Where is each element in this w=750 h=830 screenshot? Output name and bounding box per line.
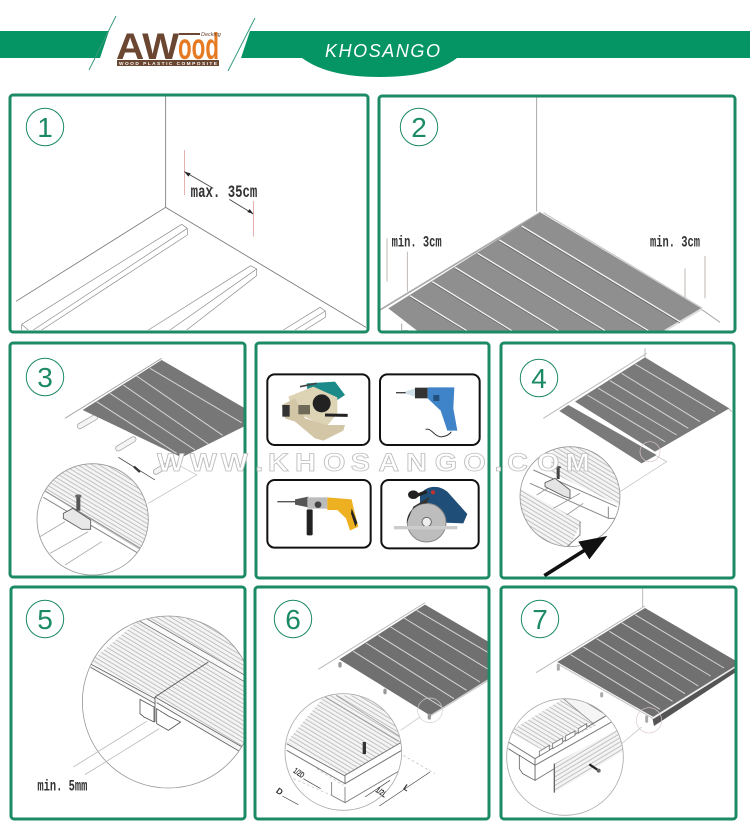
step number 6: 6 bbox=[285, 604, 301, 635]
logo: AW bbox=[116, 26, 179, 67]
drawing: deck against wall: min. 3cm bbox=[650, 233, 700, 251]
tool: miter saw bbox=[267, 374, 369, 445]
step number 5 bbox=[26, 600, 64, 638]
arrow: insert next board bbox=[544, 536, 607, 576]
panel: step 6 end fixing bbox=[255, 587, 490, 819]
step number 1: 1 bbox=[37, 112, 53, 143]
tool: yellow drill bbox=[267, 480, 371, 548]
tool: blue drill bbox=[380, 374, 480, 445]
dimension labels: 1/2D bbox=[292, 765, 307, 780]
drawing: room corner and joists bbox=[16, 95, 366, 330]
drawing: board seam detail: min. 5mm bbox=[37, 777, 87, 795]
step number 1 bbox=[26, 108, 64, 146]
drawing: deck with gap and detail bbox=[517, 348, 732, 553]
step number 5: 5 bbox=[37, 604, 53, 635]
dimension labels: 1/2L bbox=[374, 785, 389, 800]
logo divider left bbox=[89, 16, 116, 70]
step number 2 bbox=[400, 108, 438, 146]
brand title: KHOSANGO bbox=[325, 41, 440, 61]
step number 7 bbox=[521, 600, 559, 638]
panel: step 7 fascia bbox=[501, 587, 736, 819]
panel: step 1 joist spacing bbox=[10, 95, 368, 332]
tool: circular saw bbox=[381, 480, 479, 548]
step number 6 bbox=[274, 600, 312, 638]
drawing: deck with fascia board detail bbox=[507, 589, 735, 815]
watermark: WWW.KHOSANGO.COM bbox=[157, 449, 590, 477]
panel: step 5 expansion gap bbox=[11, 587, 254, 819]
drawing: deck against wall bbox=[380, 97, 720, 332]
dimension labels bbox=[276, 768, 408, 798]
step number 2: 2 bbox=[411, 112, 427, 143]
panel: step 2 perimeter gap bbox=[379, 96, 735, 332]
logo bbox=[116, 26, 222, 67]
green band right with title tab bbox=[241, 31, 750, 77]
step number 4: 4 bbox=[531, 363, 547, 394]
logo: ood bbox=[178, 26, 219, 67]
drawing: complete deck with dimension detail bbox=[274, 603, 490, 810]
logo divider right bbox=[228, 18, 255, 71]
header banner bbox=[0, 16, 750, 77]
green band left bbox=[0, 31, 109, 58]
logo: WOOD PLASTIC COMPOSITE bbox=[119, 61, 218, 67]
panel: step 4 next boards bbox=[501, 343, 734, 578]
panel: tools bbox=[256, 343, 489, 578]
step number 4 bbox=[520, 359, 558, 397]
step number 7: 7 bbox=[532, 604, 548, 635]
logo: Decking bbox=[201, 32, 222, 38]
panel: step 3 first board fixing bbox=[10, 343, 245, 577]
dimension labels: D bbox=[274, 785, 285, 797]
step number 3 bbox=[26, 358, 64, 396]
step number 3: 3 bbox=[37, 362, 53, 393]
drawing: board seam detail bbox=[37, 615, 254, 795]
drawing: deck against wall: min. 3cm bbox=[392, 233, 442, 251]
drawing: deck with clip detail bbox=[33, 358, 245, 575]
dimension labels: L bbox=[402, 782, 412, 794]
drawing: room corner and joists: max. 35cm bbox=[191, 183, 257, 203]
